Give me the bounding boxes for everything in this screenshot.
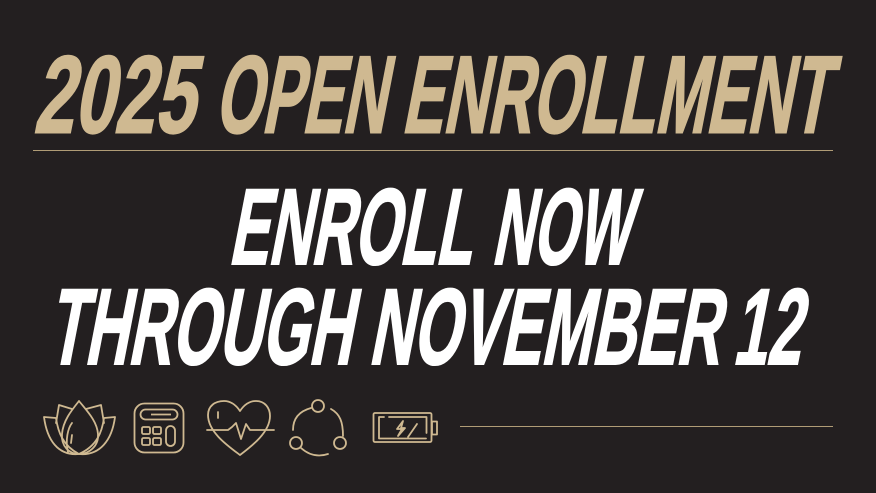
icon: lotus with water drop: [44, 401, 115, 454]
headline line 2: THROUGH: [42, 267, 370, 388]
icon: heart with pulse: [207, 401, 274, 455]
title: OPEN: [209, 32, 404, 156]
icon: calculator: [134, 404, 184, 452]
icon: battery: [374, 413, 437, 442]
headline line 2: 12: [727, 267, 819, 388]
title: 2025: [28, 32, 213, 156]
title: [28, 32, 847, 156]
icon: three connected circles: [290, 400, 346, 456]
headline line 1: NOW: [486, 167, 648, 288]
headline line 1: ENROLL: [223, 167, 490, 288]
